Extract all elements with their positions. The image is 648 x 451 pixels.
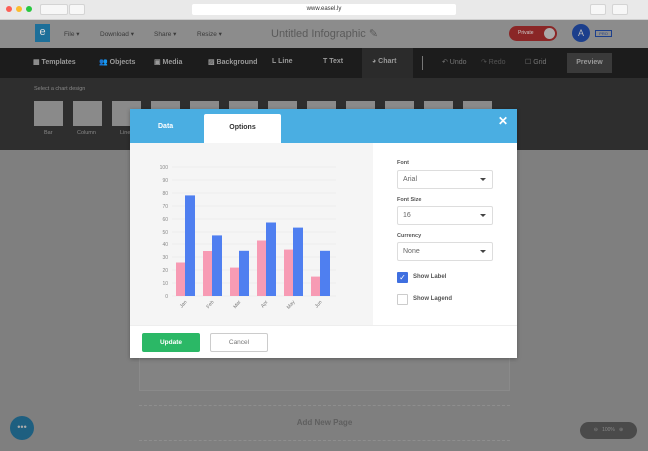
chart thumbnails: Line	[120, 130, 130, 136]
toolbar items: T Text	[323, 58, 343, 65]
footer divider	[130, 325, 517, 326]
show label checkbox	[397, 272, 446, 283]
toolbar items: ◕ Chart	[372, 58, 396, 65]
avatar: A	[578, 28, 584, 38]
bar chart: 10	[162, 281, 168, 287]
modal	[130, 109, 517, 358]
canvas page	[139, 320, 510, 391]
undo redo grid: ☐ Grid	[525, 59, 546, 66]
chart design panel	[0, 78, 648, 150]
show label checkbox: ✓	[399, 273, 406, 282]
zoom control	[580, 422, 637, 439]
toolbar items: ▨ Background	[208, 59, 257, 66]
add new page	[139, 405, 510, 441]
chart thumbnails: Column	[77, 130, 96, 136]
chart thumbnails: Bar	[44, 130, 53, 136]
chat bubble icon	[10, 416, 34, 440]
bar chart: 0	[165, 294, 168, 300]
options panel	[397, 160, 493, 305]
logo	[35, 24, 50, 42]
app header	[0, 20, 648, 48]
avatar	[572, 24, 590, 42]
bar chart: 70	[162, 204, 168, 210]
bar chart	[160, 165, 330, 311]
private toggle: Private	[518, 30, 534, 36]
close icon: ✕	[498, 114, 508, 128]
font size select	[397, 206, 493, 225]
show legend checkbox: Show Lagend	[413, 296, 452, 302]
menu: Share ▾	[154, 31, 176, 38]
menu: Resize ▾	[197, 31, 222, 38]
toolbar items: ▣ Media	[154, 59, 182, 66]
modal header	[130, 109, 517, 143]
cancel button: Cancel	[229, 339, 249, 346]
bar chart: 30	[162, 255, 168, 261]
update button	[142, 333, 200, 352]
add new page: Add New Page	[297, 418, 352, 427]
tab: data: Data	[158, 123, 173, 130]
update button: Update	[160, 339, 182, 346]
preview button: Preview	[576, 59, 603, 66]
bar chart: Feb	[205, 299, 216, 310]
show legend checkbox	[397, 294, 452, 305]
logo: e	[39, 26, 46, 38]
menu	[64, 31, 222, 38]
bar chart: 100	[160, 165, 168, 171]
private toggle	[509, 26, 557, 41]
bar chart: 60	[162, 217, 168, 223]
bar chart: Jun	[314, 299, 324, 309]
font size label: Font Size	[397, 197, 421, 203]
currency select	[397, 242, 493, 261]
toolbar items: 👥 Objects	[99, 59, 135, 66]
preview button	[567, 53, 612, 73]
font select	[397, 170, 493, 189]
bar chart: Jan	[179, 299, 189, 309]
bar chart: 20	[162, 268, 168, 274]
show label checkbox: Show Label	[413, 274, 446, 280]
window buttons	[6, 6, 32, 12]
bar chart: Mar	[232, 299, 243, 310]
undo redo grid	[442, 58, 546, 66]
address bar	[192, 4, 456, 15]
document title: Untitled Infographic ✎	[271, 28, 378, 40]
toolbar items	[33, 58, 396, 66]
tab: options: Options	[229, 124, 256, 131]
panel heading: Select a chart design	[34, 86, 85, 92]
toolbar items: ▦ Templates	[33, 59, 76, 66]
bar chart: 40	[162, 242, 168, 248]
currency label: Currency	[397, 233, 421, 239]
menu: File ▾	[64, 31, 80, 38]
bar chart: 50	[162, 230, 168, 236]
toolbar	[0, 48, 648, 78]
font label: Font	[397, 160, 409, 166]
undo redo grid: ↶ Undo	[442, 59, 467, 66]
chart thumbnails	[34, 101, 492, 136]
app header: PRO	[599, 31, 608, 36]
currency select: None	[403, 248, 420, 255]
font select: Arial	[403, 176, 417, 183]
bar chart: Apr	[260, 299, 270, 309]
font size select: 16	[403, 212, 411, 219]
menu: Download ▾	[100, 31, 134, 38]
browser chrome	[0, 0, 648, 20]
zoom control: ⊖ 100% ⊕	[594, 427, 623, 433]
toolbar items: L Line	[272, 58, 292, 65]
bar chart: 80	[162, 191, 168, 197]
tab: options	[204, 114, 281, 143]
chat bubble icon: •••	[17, 422, 27, 432]
bar chart: May	[286, 299, 297, 311]
undo redo grid: ↷ Redo	[481, 59, 506, 66]
bar chart: 90	[162, 178, 168, 184]
cancel button	[210, 333, 268, 352]
address bar: www.easel.ly	[307, 6, 341, 12]
chart preview panel	[130, 143, 373, 325]
